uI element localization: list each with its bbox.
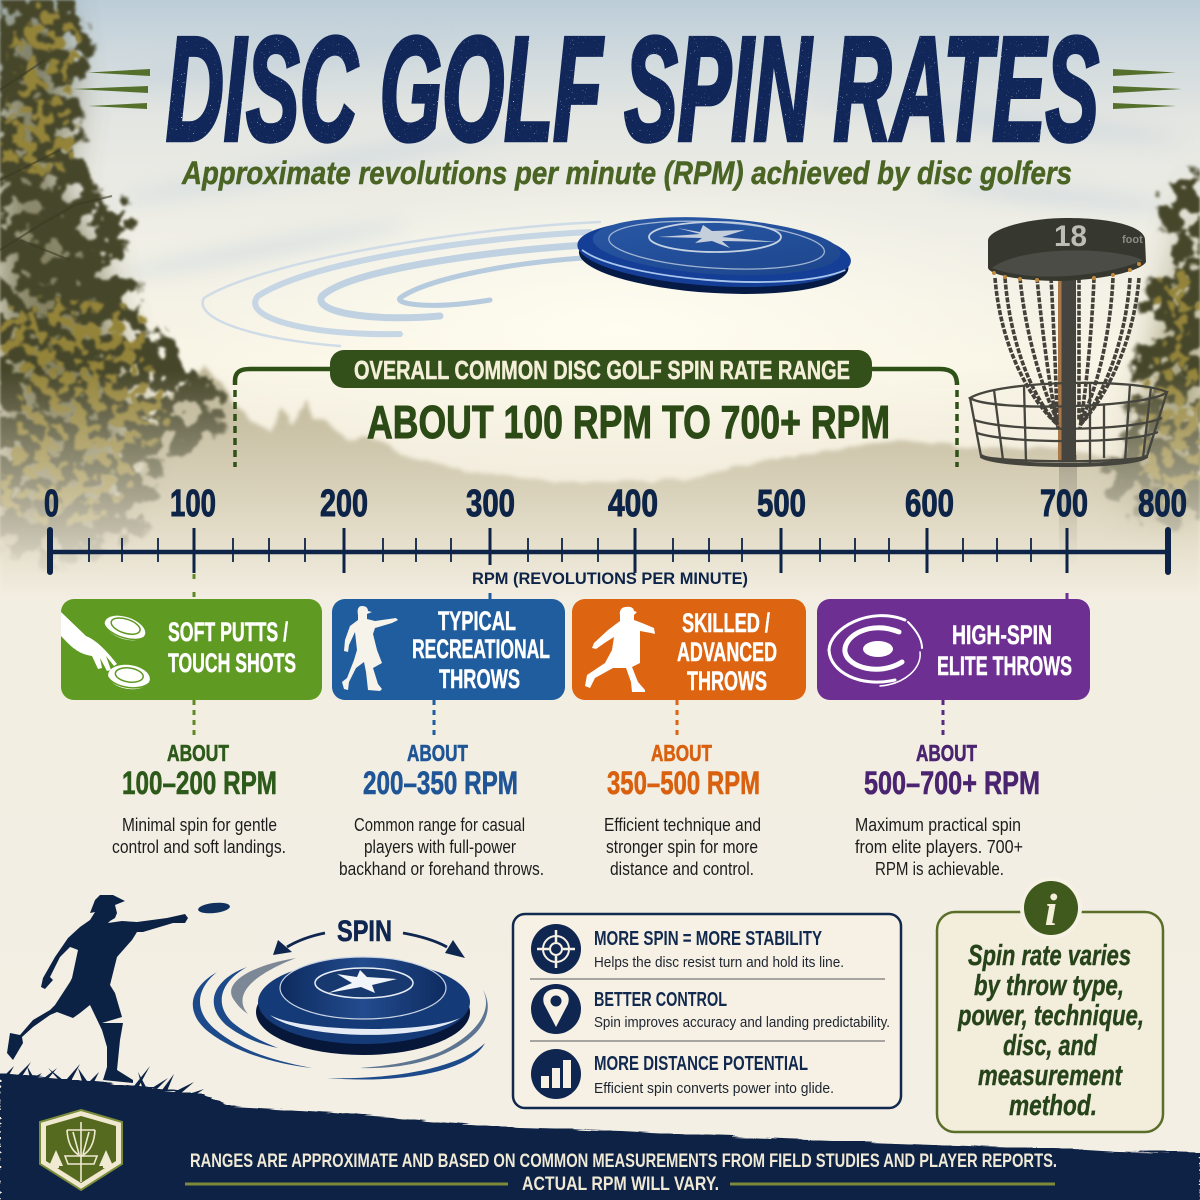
foliage underlay <box>0 0 1200 540</box>
benefit: stability: Helps the disc resist turn and hold its line. <box>594 954 844 971</box>
card: typical recreational: RECREATIONAL <box>412 634 550 664</box>
icon: target <box>531 924 581 974</box>
range pill <box>330 350 872 388</box>
range block: 500-700+: Maximum practical spin <box>855 815 1021 835</box>
card: high spin elite: ELITE THROWS <box>937 651 1072 681</box>
range block: 200-350: Common range for casual <box>354 815 525 835</box>
card: typical recreational: TYPICAL <box>438 606 516 636</box>
info note panel: method. <box>1009 1090 1097 1122</box>
range block: 200-350 <box>339 740 544 879</box>
benefit: distance <box>594 1053 834 1097</box>
benefit: control: BETTER CONTROL <box>594 989 727 1011</box>
range block: 350-500: distance and control. <box>610 859 754 879</box>
icon: info: i <box>1045 884 1058 935</box>
RPM axis: RPM (REVOLUTIONS PER MINUTE) <box>472 569 748 588</box>
icon: map pin <box>531 984 581 1034</box>
info note panel: disc, and <box>1003 1030 1098 1062</box>
info note panel: by throw type, <box>974 970 1124 1002</box>
distant treeline <box>0 365 1200 640</box>
benefit: stability <box>594 928 844 971</box>
range block: 100-200: Minimal spin for gentle <box>122 815 277 835</box>
RPM axis: 400 <box>608 483 658 525</box>
benefit: distance: MORE DISTANCE POTENTIAL <box>594 1053 808 1075</box>
range block: 500-700+: from elite players. 700+ <box>855 837 1023 857</box>
spin label and arrows: SPIN <box>337 915 392 948</box>
benefit: stability: MORE SPIN = MORE STABILITY <box>594 928 822 950</box>
range block: 100-200: control and soft landings. <box>112 837 286 857</box>
benefit: control <box>594 989 890 1031</box>
info note panel: power, technique, <box>957 1000 1144 1032</box>
icon: thrower <box>342 606 398 691</box>
RPM axis <box>44 483 1187 588</box>
card: skilled advanced <box>572 599 806 700</box>
range block: 200-350: ABOUT <box>407 740 468 766</box>
range block: 100-200: ABOUT <box>167 740 229 766</box>
decorative title stripes right <box>1113 69 1182 109</box>
info note panel: measurement <box>978 1060 1123 1092</box>
range block: 200-350: players with full-power <box>364 837 516 857</box>
range block: 100-200 <box>112 740 286 857</box>
range pill: OVERALL COMMON DISC GOLF SPIN RATE RANGE <box>354 355 850 385</box>
overall range bracket <box>235 350 957 467</box>
range block: 200-350: backhand or forehand throws. <box>339 859 544 879</box>
range block: 350-500: ABOUT <box>651 740 712 766</box>
footer ground <box>0 1062 1200 1200</box>
footer note: ACTUAL RPM WILL VARY. <box>522 1174 719 1195</box>
icon: bar chart <box>531 1049 581 1099</box>
thrower silhouette <box>7 895 230 1083</box>
RPM axis: 600 <box>905 483 954 525</box>
card: skilled advanced: ADVANCED <box>677 637 777 667</box>
card: skilled advanced: SKILLED / <box>682 608 770 638</box>
card: high spin elite <box>817 599 1090 700</box>
range value: ABOUT 100 RPM TO 700+ RPM <box>367 396 890 448</box>
decorative title stripes left <box>73 69 150 109</box>
card: high spin elite: HIGH-SPIN <box>952 620 1052 650</box>
card: skilled advanced: THROWS <box>687 666 767 696</box>
RPM axis: 300 <box>466 483 515 525</box>
disc golf basket <box>970 218 1167 565</box>
flying disc with motion swirls <box>203 210 853 346</box>
range block: 350-500 <box>604 740 761 879</box>
range block: 100-200: 100–200 RPM <box>122 765 277 801</box>
info note panel <box>937 877 1163 1132</box>
card: typical recreational <box>332 599 565 700</box>
range block: 500-700+ <box>855 740 1040 879</box>
icon: spinning disc <box>829 616 922 686</box>
benefits panel <box>513 914 901 1108</box>
range block: 500-700+: RPM is achievable. <box>875 859 1004 879</box>
spin label and arrows <box>273 915 465 958</box>
RPM axis: 100 <box>170 483 216 525</box>
RPM axis: 700 <box>1040 483 1088 525</box>
card: soft putts <box>61 599 322 700</box>
footer note <box>185 1151 1057 1195</box>
card: soft putts: SOFT PUTTS / <box>168 617 288 647</box>
subtitle: Approximate revolutions per minute (RPM) achieved by disc golfers <box>181 155 1072 191</box>
range block: 500-700+: ABOUT <box>916 740 977 766</box>
icon: info <box>1020 877 1082 939</box>
RPM axis: 0 <box>44 483 59 525</box>
badge: disc golf basket emblem <box>40 1110 122 1190</box>
range block: 350-500: stronger spin for more <box>606 837 758 857</box>
range block: 200-350: 200–350 RPM <box>363 765 518 801</box>
RPM axis: 800 <box>1138 483 1187 525</box>
range block: 350-500: Efficient technique and <box>604 815 761 835</box>
card: typical recreational: THROWS <box>439 664 520 694</box>
benefit: distance: Efficient spin converts power into glide. <box>594 1080 834 1097</box>
RPM axis: 500 <box>757 483 806 525</box>
icon: hand and discs <box>61 611 151 692</box>
info note panel: Spin rate varies <box>968 940 1131 972</box>
icon: running thrower <box>585 607 655 692</box>
range block: 500-700+: 500–700+ RPM <box>864 765 1040 801</box>
range block: 350-500: 350–500 RPM <box>607 765 760 801</box>
disc golf basket: foot <box>1122 234 1143 246</box>
card: soft putts: TOUCH SHOTS <box>168 648 296 678</box>
disc golf basket: 18 <box>1054 220 1087 253</box>
benefit: control: Spin improves accuracy and landing predictability. <box>594 1014 890 1031</box>
RPM axis: 200 <box>320 483 368 525</box>
spinning disc illustration <box>193 957 488 1080</box>
